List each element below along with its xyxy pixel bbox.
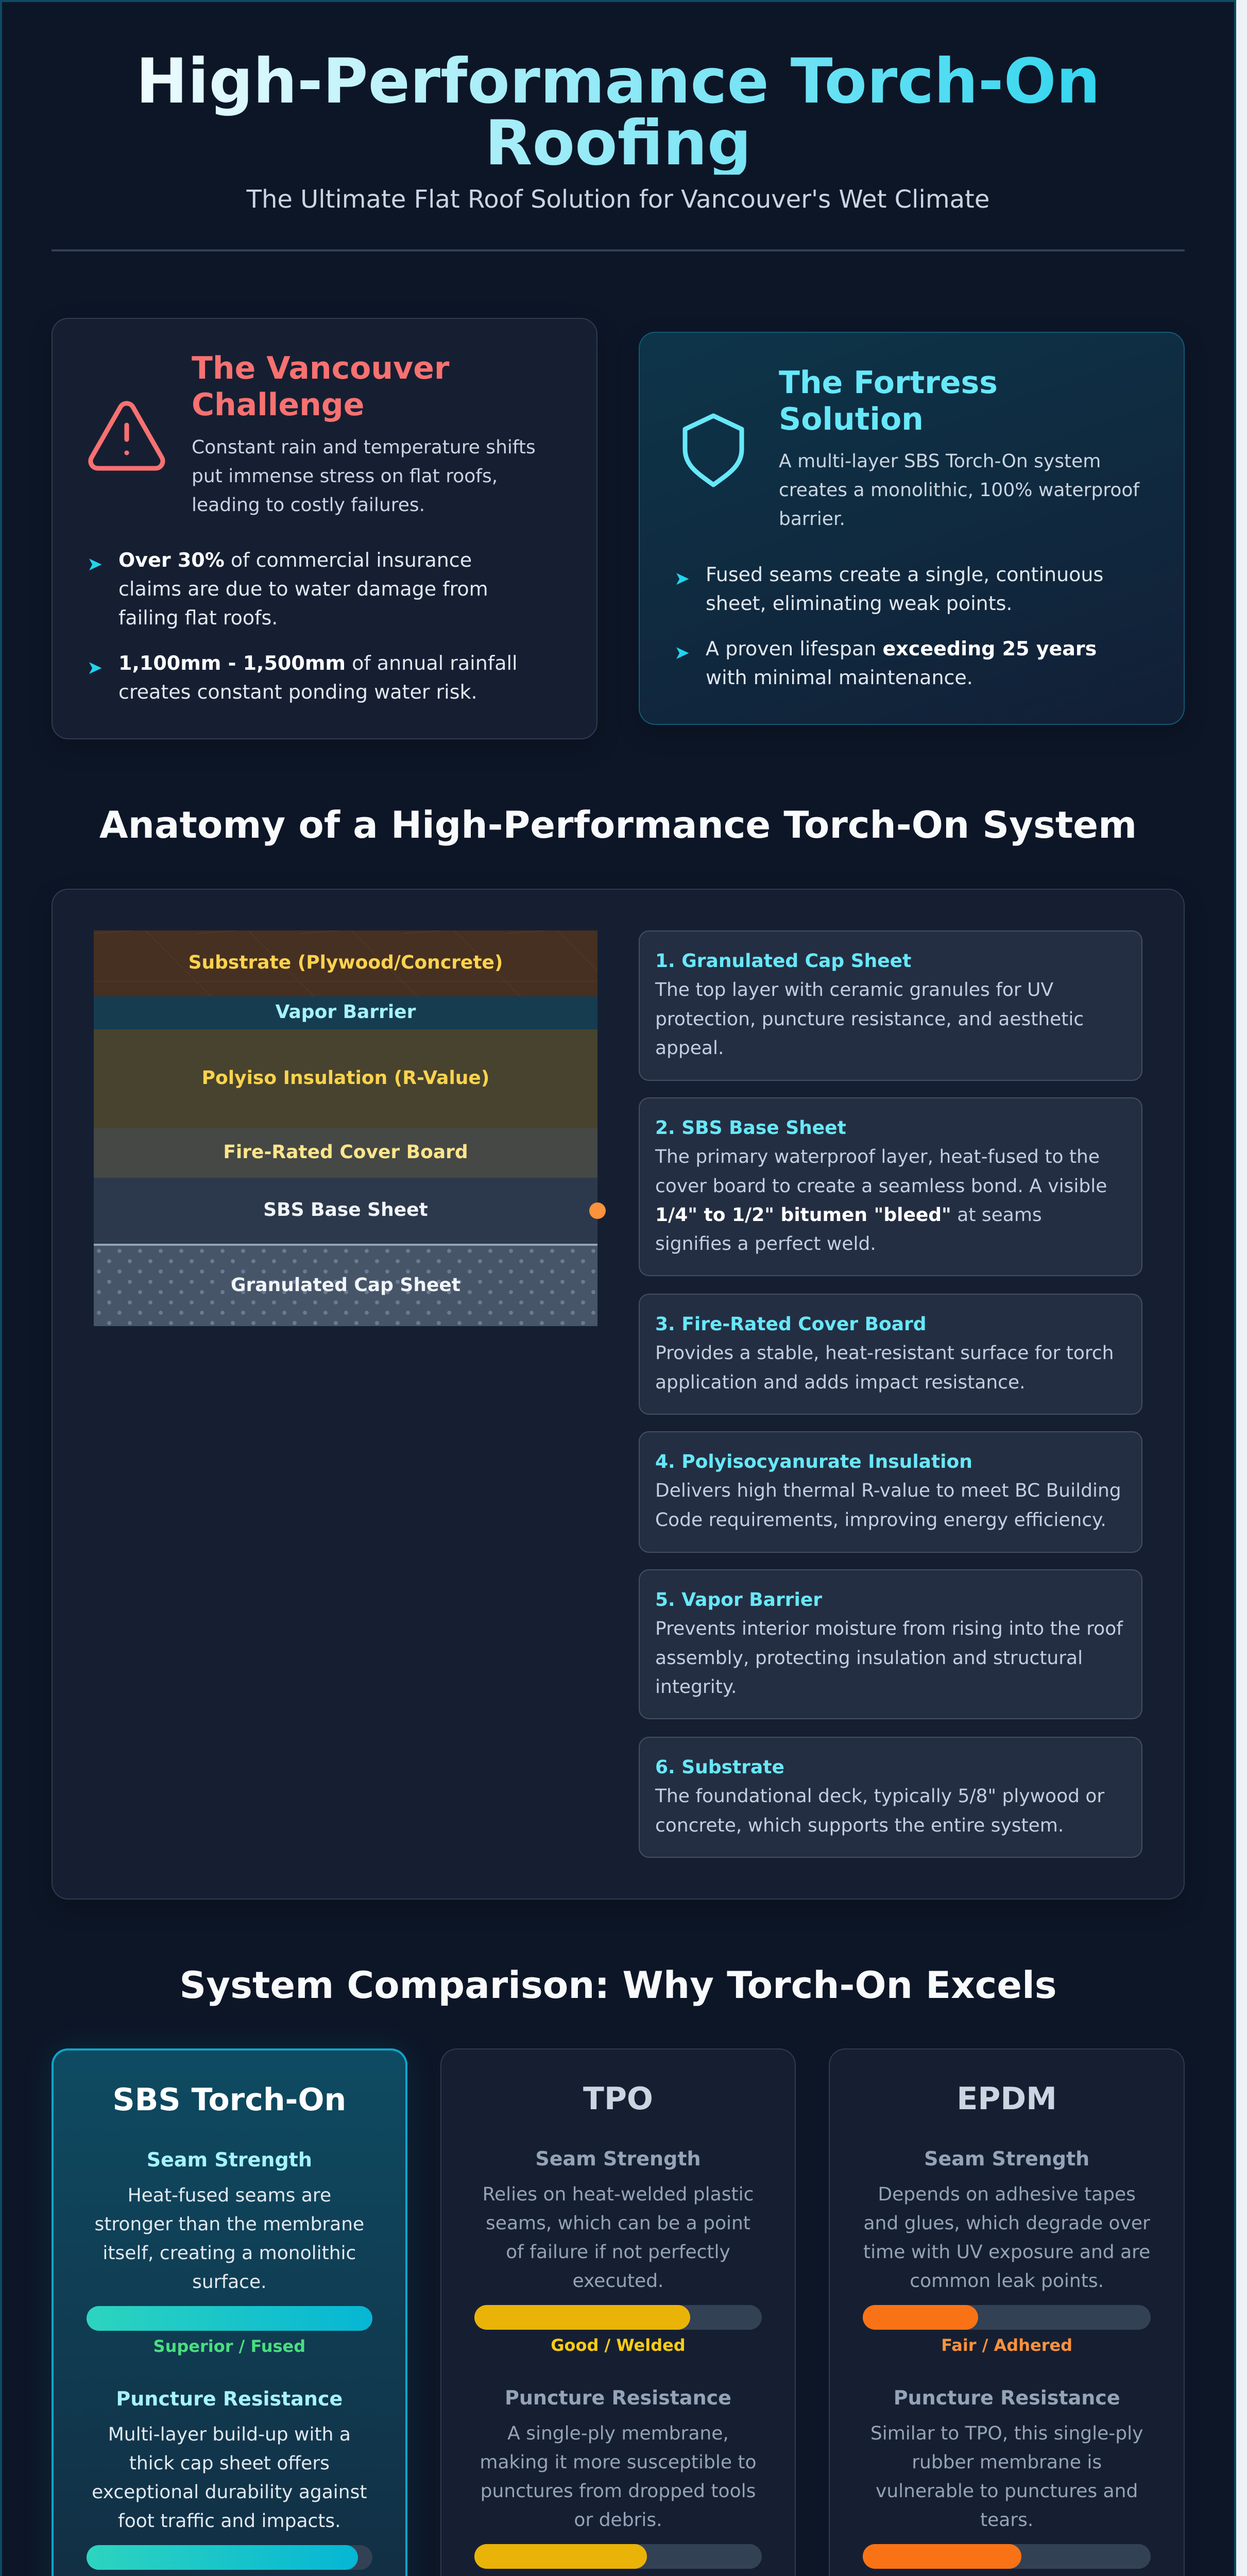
metric: seam strength: Seam Strength (147, 2148, 312, 2171)
metric: puncture resistance (474, 2386, 762, 2576)
column: EPDM (829, 2048, 1185, 2576)
icon: shield (683, 413, 744, 487)
layer card 2: signifies a perfect weld. (655, 1233, 876, 1255)
layer card 6: The foundational deck, typically 5/8" plywood or (655, 1786, 1104, 1807)
metric: seam strength (474, 2147, 762, 2355)
heading: comparison: System Comparison: Why Torch-On Excels (179, 1963, 1057, 2007)
heading: Solution (779, 401, 924, 437)
layer card 5 (639, 1569, 1142, 1719)
layer: granulated cap sheet: Granulated Cap Sheet (231, 1275, 460, 1295)
layer card 3: 3. Fire-Rated Cover Board (655, 1314, 927, 1335)
layer card 1: The top layer with ceramic granules for UV (655, 979, 1053, 1001)
layer: vapor barrier (94, 996, 597, 1029)
metric: puncture resistance (87, 2387, 372, 2576)
description (192, 437, 536, 515)
title: High-Performance Torch-On (136, 45, 1100, 117)
layer card 1: appeal. (655, 1038, 724, 1059)
layer: polyiso insulation (94, 1029, 597, 1128)
layer card 1 (639, 930, 1142, 1081)
stat: insurance claims: failing flat roofs. (118, 606, 278, 629)
metric: puncture resistance: Puncture Resistance (116, 2387, 343, 2410)
layer: SBS base sheet: SBS Base Sheet (263, 1199, 428, 1220)
description: put immense stress on flat roofs, (192, 466, 498, 486)
description: barrier. (779, 508, 845, 530)
subtitle: The Ultimate Flat Roof Solution for Vancouver's Wet Climate (247, 185, 989, 214)
heading (192, 350, 449, 423)
metric: seam strength (87, 2148, 372, 2356)
metric: seam strength: and glues, which degrade over (863, 2213, 1150, 2234)
layer: vapor barrier: Vapor Barrier (276, 1002, 416, 1022)
layer card 2: 1/4" to 1/2" bitumen "bleed" at seams (655, 1205, 1042, 1226)
layer card 4: Code requirements, improving energy efficiency. (655, 1510, 1106, 1530)
metric: seam strength: executed. (572, 2270, 663, 2292)
metric: puncture resistance: making it more susceptible to (480, 2452, 757, 2473)
metric: seam strength: Fair / Adhered (941, 2335, 1072, 2355)
heading: anatomy: Anatomy of a High-Performance Torch-On System (99, 803, 1137, 846)
heading: The Fortress (779, 365, 998, 401)
name: SBS Torch-On (112, 2082, 346, 2118)
bullet arrow: ➤ (674, 568, 690, 589)
metric: puncture resistance: rubber membrane is (912, 2452, 1102, 2473)
layer card 2 (639, 1097, 1142, 1276)
layer card 2: The primary waterproof layer, heat-fused to the (655, 1146, 1100, 1167)
description: A multi-layer SBS Torch-On system (779, 450, 1101, 472)
metric: puncture resistance: tears. (980, 2510, 1033, 2531)
layer: substrate: Substrate (Plywood/Concrete) (189, 952, 503, 973)
stat: insurance claims (118, 549, 488, 629)
icon: warning triangle (88, 401, 165, 471)
layer card 5: integrity. (655, 1676, 737, 1698)
heading: The Vancouver (192, 350, 449, 386)
metric: puncture resistance: punctures from dropped tools (481, 2481, 756, 2502)
metric: puncture resistance (863, 2386, 1151, 2576)
heading (779, 365, 998, 437)
name: TPO (583, 2081, 653, 2117)
description (779, 450, 1140, 530)
metric: seam strength: Seam Strength (535, 2147, 701, 2170)
layer card 3 (639, 1294, 1142, 1415)
layer card 5: assembly, protecting insulation and structural (655, 1648, 1083, 1668)
benefit: lifespan: with minimal maintenance. (706, 666, 973, 689)
benefit: fused seams: Fused seams create a single, continuous (706, 563, 1103, 586)
metric: seam strength: Heat-fused seams are (128, 2185, 331, 2206)
metric: seam strength: itself, creating a monolithic (103, 2243, 356, 2264)
metric: puncture resistance: or debris. (574, 2510, 662, 2531)
panel: the Vancouver challenge (52, 318, 597, 739)
layer card 3: application and adds impact resistance. (655, 1371, 1026, 1393)
layer card 5: Prevents interior moisture from rising into the roof (655, 1618, 1123, 1639)
metric: puncture resistance: exceptional durability against (92, 2482, 367, 2503)
layer card 2: 2. SBS Base Sheet (655, 1117, 846, 1139)
benefit: lifespan (706, 637, 1097, 689)
layer: substrate (94, 930, 597, 996)
layer card 1: protection, puncture resistance, and aesthetic (655, 1009, 1084, 1029)
metric: puncture resistance: Puncture Resistance (505, 2386, 731, 2409)
layer card 6: 6. Substrate (655, 1757, 784, 1778)
metric: seam strength: common leak points. (910, 2270, 1104, 2292)
panel: the fortress solution (639, 332, 1185, 725)
title: Roofing (485, 107, 751, 179)
stat: annual rainfall: 1,100mm - 1,500mm of annual rainfall (118, 651, 518, 674)
roof layer diagram (94, 930, 606, 1326)
layer card 4: Delivers high thermal R-value to meet BC Building (655, 1480, 1121, 1501)
layer card 6 (639, 1737, 1142, 1858)
benefit: fused seams (706, 563, 1103, 615)
benefit: lifespan: A proven lifespan exceeding 25 years (706, 637, 1097, 660)
layer card 1: 1. Granulated Cap Sheet (655, 951, 911, 972)
stat: insurance claims: claims are due to water damage from (118, 578, 488, 600)
stat: annual rainfall (118, 651, 518, 703)
metric: puncture resistance: Multi-layer build-up with a (108, 2424, 351, 2445)
layer card 2: cover board to create a seamless bond. A visible (655, 1176, 1107, 1196)
layer: granulated cap sheet (94, 1244, 597, 1326)
metric: seam strength: Seam Strength (924, 2147, 1089, 2170)
metric: seam strength: stronger than the membrane (94, 2214, 364, 2235)
metric: puncture resistance: Similar to TPO, this single-ply (870, 2423, 1143, 2444)
metric: puncture resistance: thick cap sheet offers (129, 2453, 330, 2474)
metric: seam strength: Depends on adhesive tapes (878, 2184, 1136, 2205)
bleed marker (589, 1202, 606, 1219)
stat: insurance claims: Over 30% of commercial insurance (118, 549, 472, 571)
layer: cover board (94, 1128, 597, 1178)
column: TPO (440, 2048, 796, 2576)
metric: puncture resistance: A single-ply membrane, (507, 2423, 729, 2444)
layer: polyiso insulation: Polyiso Insulation (R-Value) (202, 1067, 489, 1088)
layer: cover board: Fire-Rated Cover Board (223, 1142, 468, 1162)
layer: SBS base sheet (94, 1178, 597, 1244)
metric: seam strength: Good / Welded (551, 2335, 686, 2355)
metric: puncture resistance: foot traffic and impacts. (118, 2511, 341, 2532)
layer card 3: Provides a stable, heat-resistant surface for torch (655, 1343, 1114, 1364)
benefit: fused seams: sheet, eliminating weak points. (706, 592, 1013, 615)
description: Constant rain and temperature shifts (192, 437, 536, 457)
metric: seam strength: of failure if not perfectly (506, 2242, 730, 2263)
metric: puncture resistance: vulnerable to punctures and (876, 2481, 1138, 2502)
metric: puncture resistance: Puncture Resistance (894, 2386, 1120, 2409)
layer card 5: 5. Vapor Barrier (655, 1589, 822, 1611)
title (52, 50, 1185, 174)
heading: Challenge (192, 387, 364, 423)
layer card 4: 4. Polyisocyanurate Insulation (655, 1451, 972, 1472)
panel: anatomy (52, 889, 1185, 1900)
header (52, 45, 1185, 251)
layer card 6: concrete, which supports the entire system. (655, 1815, 1064, 1836)
metric: seam strength: surface. (192, 2272, 267, 2293)
name: EPDM (956, 2081, 1057, 2117)
bullet arrow: ➤ (87, 554, 103, 575)
metric: seam strength: Relies on heat-welded plastic (483, 2184, 754, 2205)
metric: seam strength: time with UV exposure and are (863, 2242, 1150, 2263)
description: leading to costly failures. (192, 495, 425, 515)
metric: seam strength: seams, which can be a point (486, 2213, 750, 2234)
bullet arrow: ➤ (674, 642, 690, 664)
description: creates a monolithic, 100% waterproof (779, 479, 1139, 501)
stat: annual rainfall: creates constant ponding water risk. (118, 680, 477, 703)
bullet arrow: ➤ (87, 657, 103, 678)
metric: seam strength (863, 2147, 1151, 2355)
metric: seam strength: Superior / Fused (153, 2336, 305, 2356)
layer card 4 (639, 1431, 1142, 1553)
column: SBS Torch-On (52, 2048, 407, 2576)
